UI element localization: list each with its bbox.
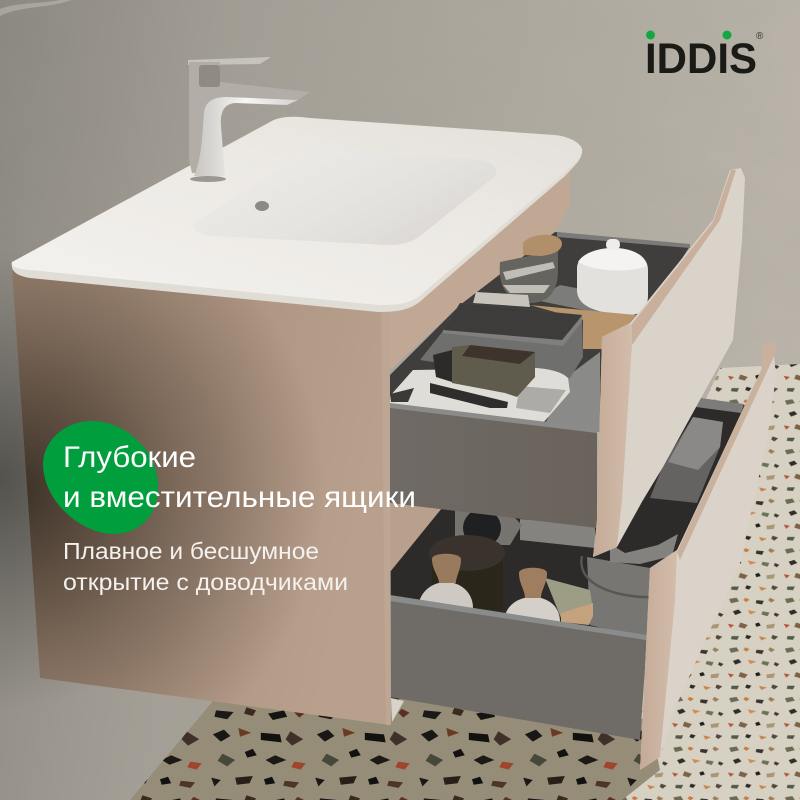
- glass jar: [429, 535, 505, 610]
- subheading: Плавное и бесшумное: [63, 538, 319, 564]
- wooden board: [530, 305, 636, 349]
- heading: и вместительные ящики: [63, 481, 416, 514]
- washbasin: [194, 151, 496, 245]
- top drawer interior: [390, 232, 690, 432]
- hair dryer: [455, 509, 678, 597]
- top drawer front box: [390, 403, 597, 528]
- storage bin: [420, 303, 583, 378]
- logo: IDDIS: IDDIS: [645, 35, 757, 83]
- razor: [390, 383, 508, 408]
- cabinet under-counter side: [385, 165, 570, 372]
- faucet chrome spout: [194, 97, 298, 176]
- bottom drawer front panel: [640, 342, 776, 770]
- subheading: [63, 538, 348, 595]
- drawer tray floor: [545, 352, 600, 432]
- top drawer front panel: [593, 168, 745, 557]
- faucet: [188, 57, 310, 182]
- terrazzo floor: [130, 364, 800, 800]
- hair brush: [473, 292, 530, 307]
- bottom drawer interior: [388, 398, 745, 640]
- logo: IDDIS: ®: [756, 31, 764, 42]
- faucet base: [190, 176, 226, 182]
- logo green dots: [646, 30, 732, 40]
- cabinet front side: [12, 270, 404, 725]
- bottle left: [418, 554, 473, 608]
- faucet body: [189, 62, 310, 173]
- drain: [255, 201, 269, 211]
- top drawer: [390, 168, 745, 557]
- green accent blob: [43, 421, 158, 534]
- bottom drawer: [388, 342, 776, 770]
- bottle right: [504, 568, 560, 622]
- round brush: [545, 578, 593, 625]
- glass bottle: [433, 345, 535, 397]
- glass jar with wooden lid: [500, 235, 562, 303]
- heading: [63, 441, 416, 514]
- folded towel in bottom drawer: [650, 417, 723, 503]
- faucet lever: [188, 57, 271, 65]
- bottom drawer front box: [390, 595, 647, 740]
- white ceramic jar: [577, 239, 648, 315]
- faucet knob: [199, 65, 220, 87]
- vanity counter top: [12, 117, 582, 312]
- white towel: [390, 368, 570, 423]
- heading: Глубокие: [63, 441, 196, 474]
- subheading: открытие с доводчиками: [63, 569, 348, 595]
